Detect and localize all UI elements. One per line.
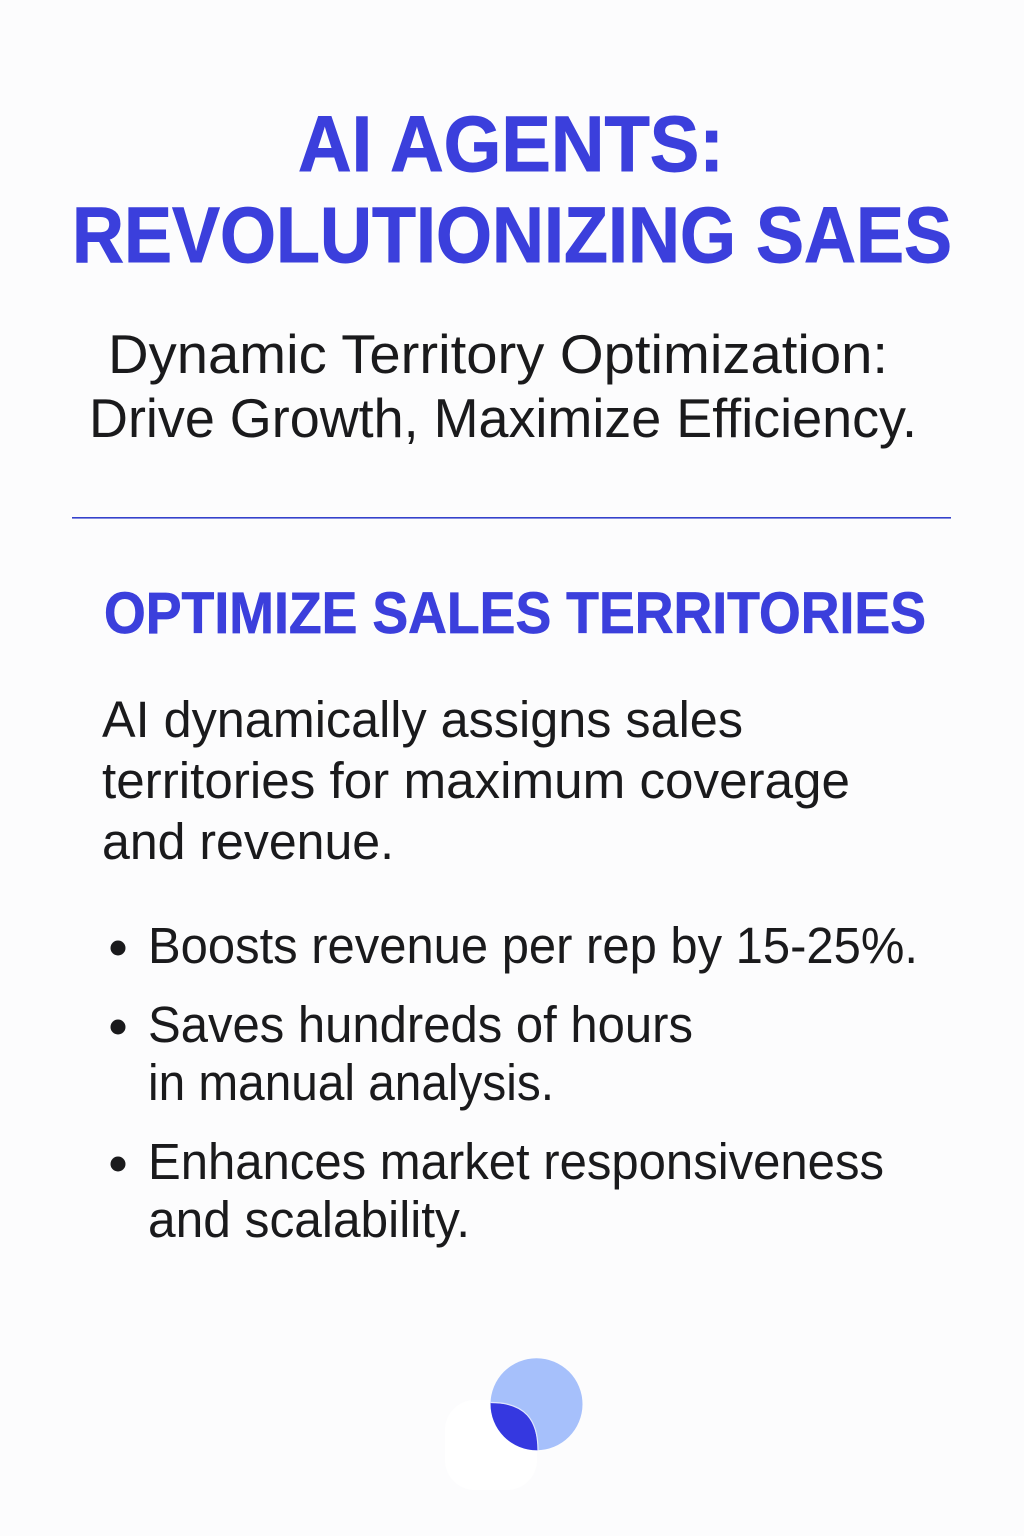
body paragraph: territories for maximum coverage: [102, 752, 850, 809]
bullet: hours saved: [110, 996, 693, 1111]
subtitle: Drive Growth, Maximize Efficiency.: [89, 387, 917, 449]
bullet: responsiveness: Enhances market responsiveness: [148, 1133, 884, 1190]
icon: logo circle: [445, 1358, 582, 1490]
title: [72, 99, 952, 279]
bullet: responsiveness: and scalability.: [148, 1191, 470, 1248]
bullet: responsiveness: [110, 1133, 884, 1248]
bullet: hours saved: Saves hundreds of hours: [148, 996, 693, 1053]
body paragraph: and revenue.: [102, 813, 394, 870]
body paragraph: [102, 691, 850, 870]
title: REVOLUTIONIZING SAES: [72, 190, 952, 279]
subtitle: Dynamic Territory Optimization:: [108, 323, 888, 385]
bullet: hours saved: in manual analysis.: [148, 1054, 554, 1111]
bullet: revenue: Boosts revenue per rep by 15-25%.: [148, 917, 918, 974]
section heading: OPTIMIZE SALES TERRITORIES: [104, 581, 926, 646]
subtitle: [89, 323, 917, 449]
body paragraph: AI dynamically assigns sales: [102, 691, 743, 748]
bullet list: [110, 917, 918, 1248]
title: AI AGENTS:: [298, 99, 724, 188]
